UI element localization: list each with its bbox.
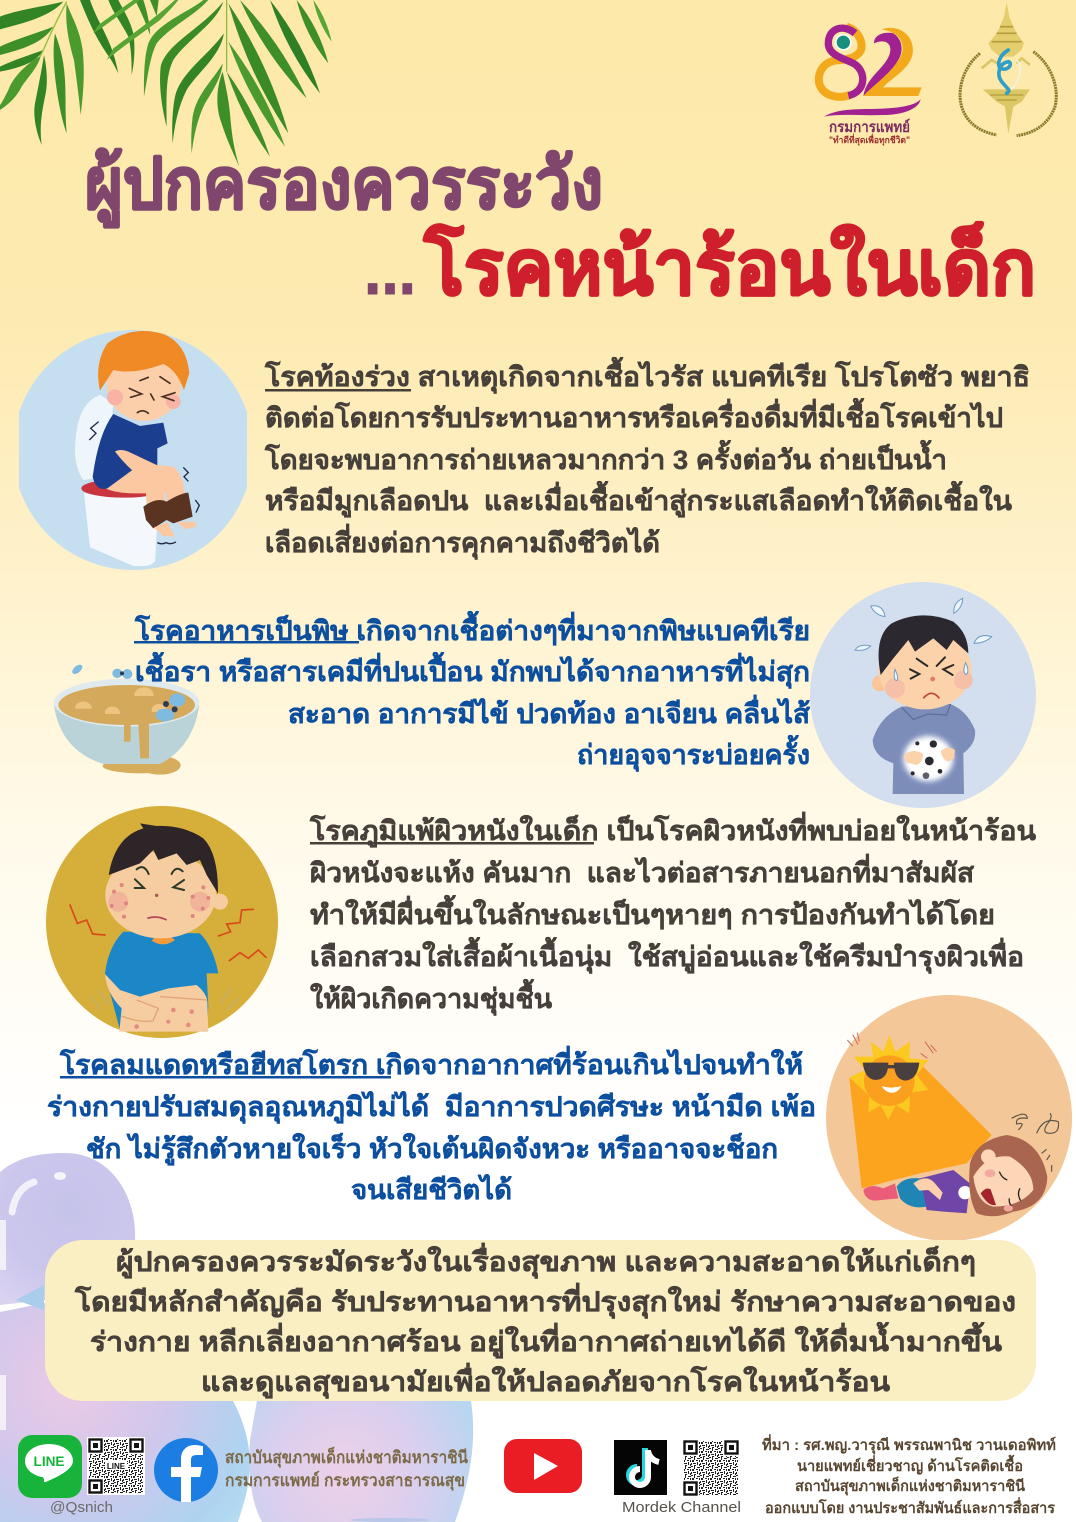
title: โรคหน้าร้อนในเด็ก xyxy=(423,222,1036,311)
text: heatstroke: จนเสียชีวิตได้ xyxy=(351,1174,512,1205)
text: diarrhea: โดยจะพบอาการถ่ายเหลวมากกว่า 3 ครั้งต่อวัน ถ่ายเป็นน้ำ xyxy=(264,439,947,475)
text: skin allergy: ผิวหนังจะแห้ง คันมาก และไวต่อสารภายนอกที่มาสัมผัส xyxy=(310,853,975,888)
title: ผู้ปกครองควรระวัง xyxy=(85,145,603,228)
logo: department 82: "ทำดีที่สุดเพื่อทุกชีวิต" xyxy=(829,133,910,146)
decorative balloons xyxy=(0,1153,473,1522)
text: food poisoning: เชื้อรา หรือสารเคมีที่ปนเปื้อน มักพบได้จากอาหารที่ไม่สุก xyxy=(135,651,810,689)
illustration: spoiled soup bowl xyxy=(54,663,199,775)
footer: LINE contact xyxy=(18,1435,145,1516)
source credits: สถาบันสุขภาพเด็กแห่งชาติมหาราชินี xyxy=(795,1476,1026,1496)
text: heatstroke: โรคลมแดดหรือฮีทสโตรก เกิดจากอากาศที่ร้อนเกินไปจนทำให้ xyxy=(59,1045,803,1080)
text: heatstroke: ร่างกายปรับสมดุลอุณหภูมิไม่ได้ มีอาการปวดศีรษะ หน้ามืด เพ้อ xyxy=(47,1091,816,1124)
text: diarrhea: เลือดเสี่ยงต่อการคุกคามถึงชีวิตได้ xyxy=(265,523,660,560)
text: heatstroke: ชัก ไม่รู้สึกตัวหายใจเร็ว หัวใจเต้นผิดจังหวะ หรืออาจจะช็อก xyxy=(86,1131,778,1166)
footer: LINE contact: LINE xyxy=(107,1462,126,1471)
text: food poisoning: สะอาด อาการมีไข้ ปวดท้อง อาเจียน คลื่นไส้ xyxy=(288,694,811,729)
title xyxy=(85,145,1036,311)
footer: LINE contact: @Qsnich xyxy=(50,1499,113,1516)
callout: advice for parents: ผู้ปกครองควรระมัดระวังในเรื่องสุขภาพ และความสะอาดให้แก่เด็กๆ xyxy=(116,1242,976,1279)
text: diarrhea xyxy=(264,356,1030,560)
text: diarrhea: หรือมีมูกเลือดปน และเมื่อเชื้อเข้าสู่กระแสเลือดทำให้ติดเชื้อใน xyxy=(265,480,1013,518)
logo: institute seal xyxy=(960,3,1056,136)
source credits: ที่มา : รศ.พญ.วารุณี พรรณพานิช วานเดอพิทท์ xyxy=(762,1434,1056,1455)
source credits: ออกแบบโดย งานประชาสัมพันธ์และการสื่อสาร xyxy=(765,1497,1056,1517)
footer: Facebook page: สถาบันสุขภาพเด็กแห่งชาติมหาราชินี xyxy=(225,1445,468,1468)
callout: advice for parents xyxy=(45,1240,1036,1401)
text: skin allergy: โรคภูมิแพ้ผิวหนังในเด็ก เป็นโรคผิวหนังที่พบบ่อยในหน้าร้อน xyxy=(309,811,1037,848)
illustration: boy with skin allergy xyxy=(46,806,278,1038)
icon: YouTube xyxy=(504,1439,582,1493)
text: diarrhea: ติดต่อโดยการรับประทานอาหารหรือเครื่องดื่มที่มีเชื้อโรคเข้าไป xyxy=(265,397,1003,433)
footer: TikTok channel xyxy=(614,1439,741,1516)
text: food poisoning: โรคอาหารเป็นพิษ เกิดจากเชื้อต่างๆที่มาจากพิษแบคทีเรีย xyxy=(134,610,810,646)
text: skin allergy: ทำให้มีผื่นขึ้นในลักษณะเป็นๆหายๆ การป้องกันทำได้โดย xyxy=(310,894,995,930)
callout: advice for parents: และดูแลสุขอนามัยเพื่อให้ปลอดภัยจากโรคในหน้าร้อน xyxy=(201,1362,891,1399)
text: skin allergy: เลือกสวมใส่เสื้อผ้าเนื้อนุ่ม ใช้สบู่อ่อนและใช้ครีมบำรุงผิวเพื่อ xyxy=(310,936,1024,974)
illustration: boy on toilet xyxy=(13,330,253,570)
text: skin allergy xyxy=(309,811,1037,1016)
text: skin allergy: ให้ผิวเกิดความชุ่มชื้น xyxy=(310,978,553,1016)
footer: TikTok channel: Mordek Channel xyxy=(622,1499,741,1516)
title: ... xyxy=(364,231,416,309)
text: food poisoning xyxy=(134,610,811,772)
illustration: boy with stomach ache xyxy=(810,582,1036,808)
source credits xyxy=(762,1434,1056,1517)
footer: LINE contact: LINE xyxy=(34,1453,64,1469)
logo: department 82: กรมการแพทย์ xyxy=(829,118,910,136)
text: heatstroke xyxy=(47,1045,816,1205)
footer: Facebook page: กรมการแพทย์ กระทรวงสาธารณสุข xyxy=(225,1470,465,1491)
logo: department 82 xyxy=(819,27,922,146)
text: diarrhea: โรคท้องร่วง สาเหตุเกิดจากเชื้อไวรัส แบคทีเรีย โปรโตซัว พยาธิ xyxy=(264,356,1030,394)
source credits: นายแพทย์เชี่ยวชาญ ด้านโรคติดเชื้อ xyxy=(797,1454,1023,1475)
callout: advice for parents: ร่างกาย หลีกเลี่ยงอากาศร้อน อยู่ในที่อากาศถ่ายเทได้ดี ให้ดื่มน้ำมากขึ้น xyxy=(90,1321,1003,1359)
text: food poisoning: ถ่ายอุจจาระบ่อยครั้ง xyxy=(577,734,810,772)
callout: advice for parents: โดยมีหลักสำคัญคือ รับประทานอาหารที่ปรุงสุกใหม่ รักษาความสะอาดของ xyxy=(74,1282,1016,1319)
footer: Facebook page xyxy=(154,1438,468,1502)
palm leaves xyxy=(0,0,332,167)
illustration: heatstroke xyxy=(826,995,1072,1241)
